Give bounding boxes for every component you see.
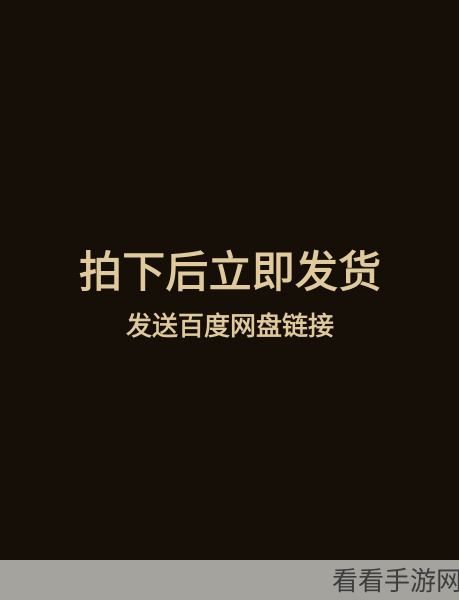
watermark text: 看看手游网 (332, 561, 459, 598)
subtitle: 发送百度网盘链接 (126, 311, 334, 341)
watermark bar (0, 560, 459, 600)
title: 拍下后立即发货 (79, 249, 381, 297)
